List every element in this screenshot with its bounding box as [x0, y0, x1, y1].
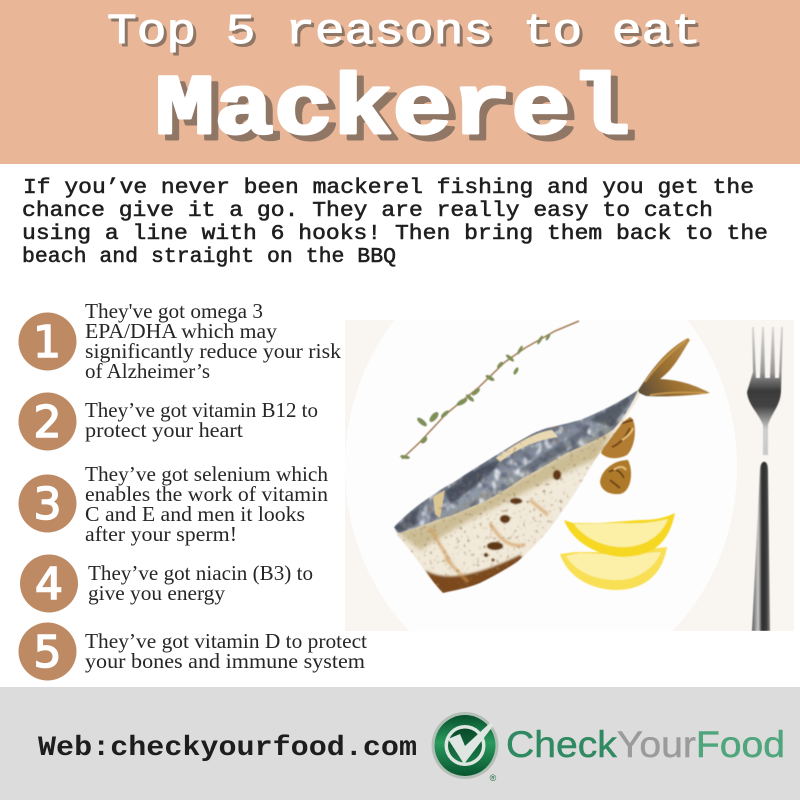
reason 2	[18, 392, 318, 450]
number badge 3	[18, 474, 76, 532]
logo icon: green check badge: ®	[490, 773, 497, 783]
number badge 1: 1	[33, 317, 61, 368]
intro paragraph: using a line with 6 hooks! Then bring them back to the	[22, 223, 768, 246]
lemon wedges	[560, 513, 675, 590]
logo icon: green check badge	[432, 712, 498, 783]
title: Top 5 reasons to eat: Top 5 reasons to eat	[110, 10, 704, 59]
title: Top 5 reasons to eat: Top 5 reasons to eat	[107, 7, 701, 56]
reason 2 text	[85, 398, 318, 442]
reason 1 text: significantly reduce your risk	[85, 339, 342, 363]
fork	[747, 327, 783, 631]
header banner	[0, 0, 800, 165]
number badge 3: 3	[34, 479, 62, 530]
reason 3 text: C and E and men it looks	[85, 502, 305, 526]
blue-grey back	[394, 390, 638, 534]
reason 1	[18, 299, 342, 383]
intro paragraph: beach and straight on the BBQ	[22, 246, 396, 269]
reason 1 text	[85, 299, 342, 383]
number badge 4	[20, 554, 78, 612]
title: Mackerel: Mackerel	[162, 68, 637, 165]
thyme sprig	[400, 321, 579, 460]
reason 5 text: your bones and immune system	[85, 649, 365, 673]
reason 4 text: They’ve got niacin (B3) to	[88, 561, 313, 585]
reason 3 text: They’ve got selenium which	[85, 462, 329, 486]
intro paragraph: chance give it a go. They are really easy to catch	[22, 200, 713, 223]
number badge 1	[18, 312, 76, 370]
reason 3 text	[85, 462, 329, 546]
intro paragraph	[22, 177, 768, 269]
skin mottling	[395, 396, 635, 530]
reason 5 text: They’ve got vitamin D to protect	[85, 629, 367, 653]
charred skin edge	[425, 555, 525, 598]
dark skin patches	[445, 460, 500, 505]
reason 5 text	[85, 629, 367, 673]
reason 2 text: They’ve got vitamin B12 to	[85, 398, 318, 422]
number badge 2	[18, 392, 76, 450]
reason 3 text: after your sperm!	[85, 522, 237, 546]
number badge 2: 2	[34, 397, 62, 448]
reason 4 text: give you energy	[88, 581, 225, 605]
reason 2 text: protect your heart	[85, 418, 243, 442]
fish tail	[637, 338, 710, 396]
logo wordmark: CheckYourFood	[506, 723, 785, 765]
plate	[345, 246, 737, 688]
number badge 4: 4	[35, 559, 63, 610]
reason 5	[18, 622, 367, 680]
photo: grilled mackerel on a plate	[345, 320, 794, 631]
website text: Web:checkyourfood.com	[38, 733, 417, 764]
lower wedge	[560, 547, 667, 590]
intro paragraph: If you’ve never been mackerel fishing and you get the	[23, 177, 754, 200]
reason 4 text	[88, 561, 313, 605]
footer band	[0, 687, 800, 800]
reason 1 text: They've got omega 3	[85, 299, 263, 323]
number badge 5: 5	[34, 627, 62, 678]
upper wedge	[564, 513, 675, 557]
orange grill marks	[430, 500, 548, 582]
cream strip on back	[496, 430, 558, 462]
reason 4	[20, 554, 313, 612]
browned spots	[484, 470, 561, 562]
fish body	[385, 385, 645, 600]
reason 3	[18, 462, 329, 546]
pepper specks	[398, 420, 624, 590]
title: Mackerel: Mackerel	[155, 62, 630, 159]
reason 1 text: EPA/DHA which may	[85, 319, 278, 343]
reason 3 text: enables the work of vitamin	[85, 482, 329, 506]
number badge 5	[18, 622, 76, 680]
reason 1 text: of Alzheimer’s	[85, 359, 210, 383]
golden band	[398, 430, 613, 550]
flesh	[395, 390, 640, 577]
garlic cloves	[600, 417, 635, 494]
